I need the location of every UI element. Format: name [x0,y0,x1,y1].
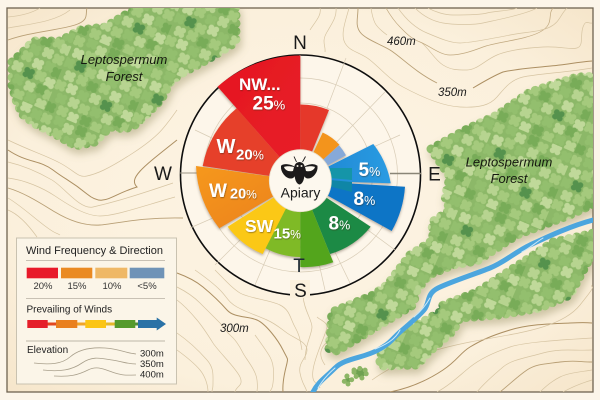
wedge: SW yellow [228,180,300,254]
label: W 20 lower: 20% [230,186,257,202]
label: SW 15: 15% [274,226,301,242]
wind rose compass [154,33,441,302]
elevation label 300m: 300m [220,323,249,335]
elevation label 350m: 350m [438,87,467,99]
compass letter S: S [294,281,307,302]
elevation label 460m: 460m [387,36,416,48]
label: Apiary: Apiary [281,185,320,201]
elevation labels: 300m [140,348,164,360]
wedge: S green [300,180,333,267]
compass letter T: T [293,256,305,277]
compass dial [180,55,420,295]
elevation labels: 400m [140,370,164,380]
forest: right slope [329,76,600,351]
label: W 20 upper: W [216,136,236,158]
label: W 20 upper: 20% [236,146,264,164]
dial grid rings and spokes [190,55,400,290]
elevation sample contours [34,348,136,376]
prevailing winds arrow [27,318,166,330]
apiary hub [269,150,331,212]
teal inner patch [330,168,352,180]
river [313,220,593,392]
wedge: NW red [218,55,300,180]
forest label: top left: Forest [106,69,144,84]
wedge: NNE orange [300,132,339,180]
elevation labels: 350m [140,359,164,370]
forest label: right: Forest [491,171,529,186]
wedge: SSW lime [265,180,300,257]
compass letter S [290,280,310,302]
legend heading: Wind Frequency & Direction [26,245,163,257]
frequency labels [33,281,157,292]
frequency labels: 10% [102,281,122,292]
label: W 20 lower [209,181,257,202]
label: W 20 upper [216,136,264,164]
compass letter W: W [154,164,172,185]
panel: legend [16,238,176,384]
label: 5 percent: 5% [358,160,380,181]
frequency labels: <5% [137,281,157,292]
wedge: W orange [196,166,300,228]
label: NW 25: NW... [239,75,281,94]
label: 8 percent green: 8% [328,214,350,234]
forest label: top left: Leptospermum [81,52,167,67]
prevailing winds heading: Prevailing of Winds [26,304,112,316]
label: SW 15: SW [245,216,274,236]
compass letter E: E [428,164,441,186]
wedge: NE light blue [300,145,346,180]
wedge: W red-orange [203,108,300,180]
elevation labels [140,348,164,380]
label: NW 25: 25% [252,94,286,114]
frequency labels: 15% [67,281,87,292]
frequency labels: 20% [33,281,53,292]
wedge: ESE blue 8 [300,180,405,231]
wedge: E blue 5 [300,144,391,183]
wedge: N [300,104,329,180]
label: 8 percent blue: 8% [354,189,375,210]
label: NW 25 [239,75,286,114]
wedges [196,55,405,267]
label: SW 15 [245,216,301,242]
forest: riverside strip [344,231,600,385]
icon: bee [281,156,317,184]
wedge: SE dark green [300,180,371,254]
wedge labels [209,75,380,242]
compass letter N: N [293,33,307,54]
frequency swatches [27,268,164,278]
label: W 20 lower: W [209,181,227,202]
forest label: right: Leptospermum [466,154,552,170]
forest: top left [12,8,236,146]
elevation heading: Elevation [27,345,68,356]
